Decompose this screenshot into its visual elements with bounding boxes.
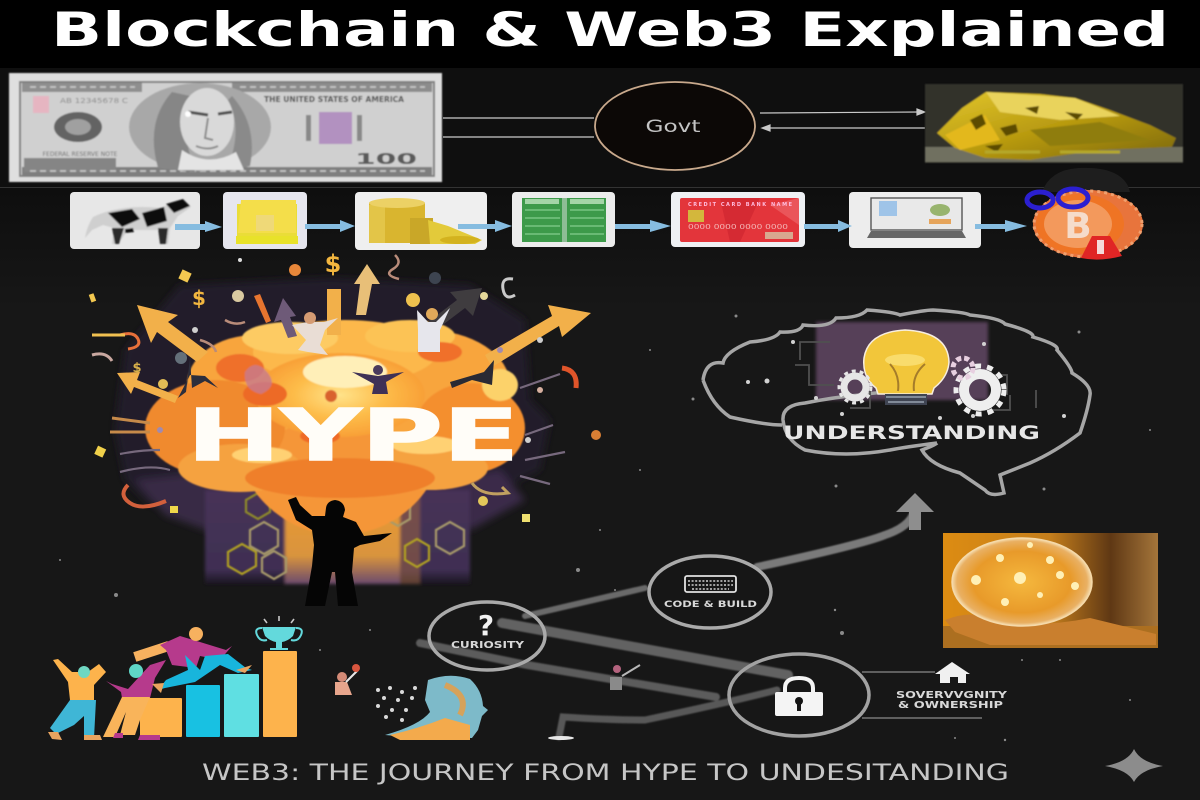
icon: pink gear <box>953 358 973 378</box>
icon: cow <box>85 199 191 244</box>
card header: CREDIT CARD BANK NAME <box>688 202 793 208</box>
govt label: Govt <box>646 117 701 137</box>
title: Blockchain & Web3 Explained <box>51 3 1169 58</box>
node: code and build <box>649 556 771 628</box>
sovereignty connector lines <box>862 672 982 718</box>
icon: small gear <box>839 371 871 403</box>
icon: house <box>935 662 970 683</box>
question mark: ? <box>478 609 494 642</box>
banknote image <box>9 73 442 182</box>
hype explosion <box>89 250 601 606</box>
dollar signs <box>132 250 341 376</box>
pink serial mark <box>33 96 49 113</box>
orange explosion cloud <box>145 320 525 535</box>
arrow: purple <box>274 298 297 338</box>
icon: laptop <box>867 198 966 238</box>
person silhouette <box>288 497 392 606</box>
small figure on path <box>610 665 640 690</box>
dollar signs: $ <box>325 250 341 278</box>
icon: gold coins <box>369 198 482 244</box>
arrows govt to gold <box>760 109 925 131</box>
gold nugget image <box>925 84 1183 163</box>
person: right <box>417 308 450 352</box>
hand <box>945 614 1156 645</box>
person: leaping <box>133 627 252 693</box>
cash card <box>512 192 615 247</box>
icon: light bulb <box>864 330 949 405</box>
icon: trophy <box>256 616 302 650</box>
code and build label: CODE & BUILD <box>664 600 757 610</box>
circuit dots <box>376 686 417 722</box>
govt circle <box>595 82 755 170</box>
card number: 0000 0000 0000 0000 <box>688 223 788 231</box>
sovereignty label: SOVERVVGNITY <box>896 690 1007 701</box>
curiosity label: CURIOSITY <box>451 640 524 651</box>
portrait oval <box>129 83 271 172</box>
icon: padlock <box>775 678 823 716</box>
arrow: centre up <box>327 289 341 335</box>
arrow: top right up <box>354 264 380 315</box>
bar chart <box>140 651 297 737</box>
person: centre left <box>292 318 338 355</box>
credit card <box>671 192 805 247</box>
arrow: up right <box>485 305 591 367</box>
icon: red credit card <box>680 198 799 242</box>
hexagon pillar <box>205 490 470 584</box>
cow card <box>70 192 200 249</box>
divider <box>0 187 1200 188</box>
arrow head <box>896 493 934 530</box>
coins card <box>355 192 487 250</box>
dollar signs: $ <box>192 286 206 310</box>
glowing globe photo <box>943 533 1158 648</box>
arrows between cards <box>175 220 1027 232</box>
rising bars with climbing team <box>48 616 302 740</box>
person: left runner <box>178 358 218 398</box>
icon: yellow bag <box>236 200 298 244</box>
journey path <box>420 493 1010 740</box>
dark purple confetti field <box>115 278 550 535</box>
brain lower lobe <box>703 380 937 454</box>
evolution of money row <box>70 168 1143 260</box>
laptop card <box>849 192 981 248</box>
arrow: up left <box>137 305 208 362</box>
bag card <box>223 192 307 249</box>
arrow: dark grey <box>428 288 482 330</box>
bitcoin letter: B <box>1064 206 1092 247</box>
arrows banknote to govt <box>443 118 594 137</box>
person: right runner <box>450 360 494 388</box>
icon: cash stacks <box>522 198 606 242</box>
globe <box>952 538 1092 626</box>
denomination: 100 <box>355 150 417 168</box>
security strip <box>319 112 352 144</box>
icon: large gear <box>956 366 1004 414</box>
star speckles <box>59 314 1151 741</box>
understanding label: UNDERSTANDING <box>783 422 1040 444</box>
treasury seal <box>54 112 102 142</box>
circuit traces <box>795 342 1036 410</box>
path base glow <box>548 736 574 740</box>
celebrating people <box>175 308 494 398</box>
banknote lettering: THE UNITED STATES OF AMERICA <box>264 95 405 104</box>
icon: keyboard <box>685 576 736 592</box>
banknote image: FEDERAL RESERVE NOTE <box>43 151 118 158</box>
title bar <box>0 0 1200 68</box>
icon: bitcoin with hat and glasses <box>1027 168 1143 260</box>
bottom caption: WEB3: THE JOURNEY FROM HYPE TO UNDESITANDING <box>202 761 1009 786</box>
HYPE label: HYPE <box>187 394 519 477</box>
banknote image: AB 12345678 C <box>60 97 128 105</box>
glasses <box>1027 189 1088 208</box>
confetti <box>89 255 601 522</box>
brain outline <box>703 310 1090 494</box>
arrow: left lower <box>117 372 178 403</box>
globe nodes <box>971 542 1079 606</box>
brain dots <box>746 340 1066 420</box>
dollar signs: $ <box>132 361 142 376</box>
small waving figure <box>335 664 360 695</box>
node: lock <box>729 654 869 736</box>
person: climbing <box>103 660 166 740</box>
purple glow behind bulb <box>816 322 988 400</box>
red lock <box>1081 236 1122 260</box>
arrow: orange streak <box>254 294 271 323</box>
money row band <box>0 68 1200 188</box>
person: cheering <box>48 659 106 740</box>
sparkle star <box>1105 749 1163 782</box>
profile head with circuit <box>376 676 488 740</box>
understanding brain <box>703 310 1090 494</box>
path segments <box>420 505 915 737</box>
person: centre purple <box>352 372 404 394</box>
sovereignty label: & OWNERSHIP <box>898 700 1003 711</box>
node: curiosity <box>429 602 545 670</box>
hype arrows <box>117 264 591 403</box>
evolution row band <box>0 188 1200 308</box>
